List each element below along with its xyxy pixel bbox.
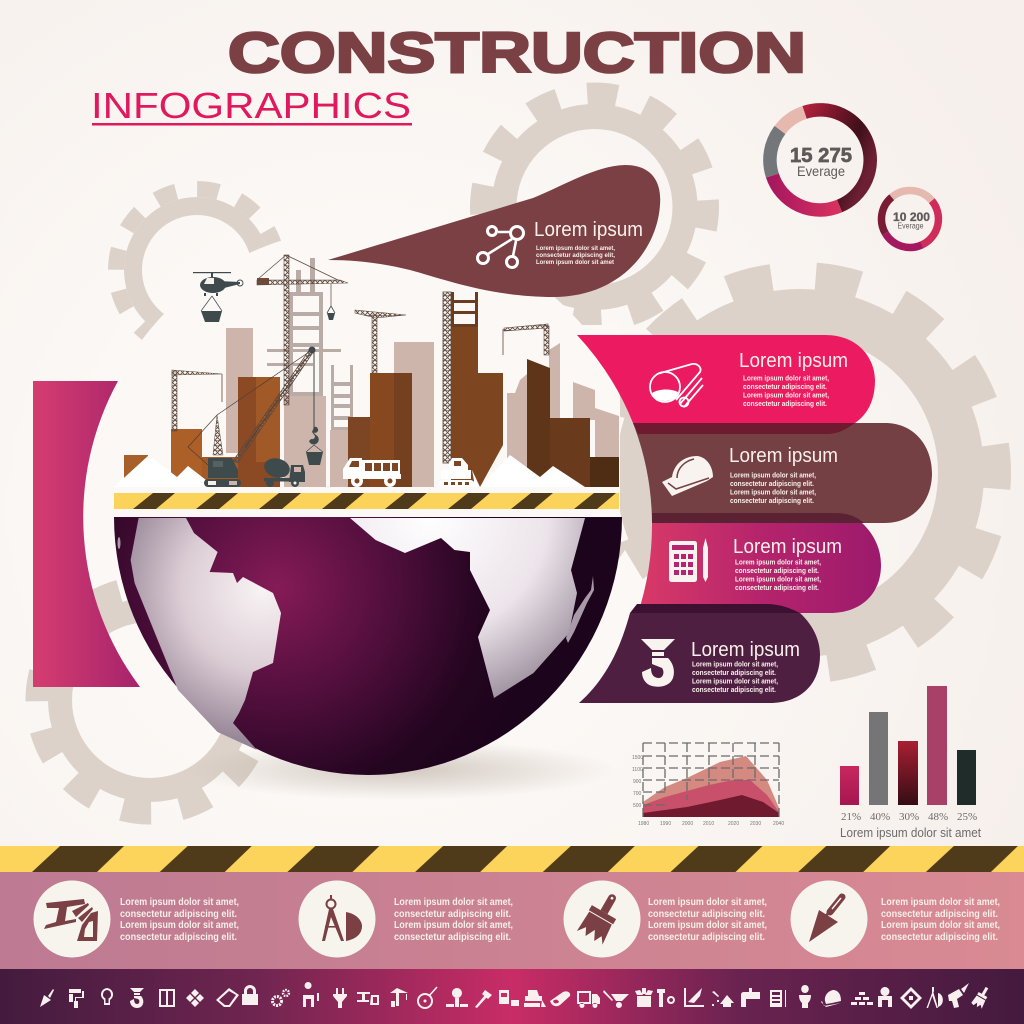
mixer truck (262, 455, 305, 487)
dump truck (343, 458, 401, 487)
icon: crane hook (641, 639, 675, 687)
body text: consectetur adipiscing elit. (743, 401, 827, 408)
white circle behind globe (85, 227, 651, 793)
bar values: 21% (841, 811, 861, 823)
icon: four diamonds (186, 989, 204, 1007)
subtitle: INFOGRAPHICS (91, 85, 411, 126)
bulldozer (439, 458, 480, 487)
body text: Lorem ipsum dolor sit amet, (730, 472, 816, 480)
gear: upper left (106, 179, 288, 361)
donut: 10 200: 10 200 (893, 210, 930, 224)
heading: Lorem ipsum (729, 445, 838, 467)
icon: drafting (684, 988, 704, 1007)
panel: band 1 pink (577, 335, 875, 423)
axis labels: 1990 (660, 821, 671, 827)
icon: bolt and nut (657, 989, 675, 1007)
axis labels: 1500 (632, 755, 643, 761)
heading: Lorem ipsum (534, 219, 643, 241)
text: Lorem ipsum dolor sit amet, (881, 897, 1000, 908)
land: madagascar (566, 576, 594, 643)
icon: wheelbarrow (603, 990, 629, 1008)
land: south america (131, 518, 281, 750)
text (120, 897, 239, 943)
body text (743, 376, 829, 408)
text: consectetur adipiscing elit. (394, 909, 511, 920)
icon row band (0, 969, 1024, 1024)
icon: steel beams (44, 899, 98, 941)
text: Lorem ipsum dolor sit amet, (648, 897, 767, 908)
text: Lorem ipsum dolor sit amet, (394, 920, 513, 931)
donut: 10 200 (881, 191, 938, 247)
axis labels: 700 (633, 791, 642, 797)
body text: consectetur adipiscing elit. (692, 670, 776, 677)
bar values: 25% (957, 811, 977, 823)
icon: spatula tool (475, 990, 492, 1008)
text: consectetur adipiscing elit. (648, 909, 765, 920)
text (648, 897, 767, 943)
body text: Lorem ipsum dolor sit amet, (692, 662, 778, 668)
icon: compass mini (926, 987, 943, 1008)
hazard strip: bottom (0, 846, 1024, 872)
text: Lorem ipsum dolor sit amet, (120, 920, 239, 931)
brown buildings (124, 455, 148, 480)
bar chart (840, 686, 981, 840)
left pink bar (33, 381, 140, 687)
body text: consectetur adipiscing elit. (692, 687, 776, 694)
icon: light bulb (101, 988, 113, 1005)
body text: consectetur adipiscing elit. (735, 568, 819, 575)
body text (735, 560, 821, 592)
icon: machine (499, 990, 519, 1006)
tower crane: large (257, 255, 348, 405)
icons (40, 982, 992, 1010)
text: Lorem ipsum dolor sit amet, (394, 897, 513, 908)
info item 3 (564, 880, 767, 958)
body text: Lorem ipsum dolor sit amet, (743, 376, 829, 382)
text: consectetur adipiscing elit. (394, 932, 511, 943)
text: consectetur adipiscing elit. (120, 932, 237, 943)
body text: Lorem ipsum dolor sit amet, (692, 678, 778, 686)
crawler crane (188, 346, 323, 487)
icon: gears (272, 990, 289, 1006)
city skyline (114, 258, 619, 487)
heading: Lorem ipsum (733, 536, 842, 558)
icon: hard hat (821, 990, 841, 1007)
icon: paint roller (69, 989, 84, 1008)
icon: bricks (851, 992, 873, 1005)
axis labels: 1980 (638, 821, 649, 827)
icon: hook (130, 988, 144, 1008)
panel: band 2 brown (633, 423, 932, 523)
area chart (632, 743, 784, 827)
body text: consectetur adipiscing elit. (743, 384, 827, 391)
areas (643, 756, 779, 817)
body text (730, 472, 816, 505)
grid (643, 743, 779, 817)
icon: pipes (550, 991, 570, 1006)
speech bubble panel (328, 165, 660, 297)
body text: Lorem ipsum dolor sit amet (536, 259, 615, 266)
icon: worker (303, 982, 319, 1007)
white wedge beside globe (500, 550, 645, 712)
gear: lower left (24, 574, 276, 826)
icon: pipes (650, 364, 703, 407)
icon: calculator and pencil (669, 538, 708, 582)
axis labels (632, 755, 784, 827)
body text: Lorem ipsum dolor sit amet, (735, 560, 821, 566)
lattice tower (443, 292, 451, 463)
heading: Lorem ipsum (739, 350, 848, 372)
text: consectetur adipiscing elit. (881, 932, 998, 943)
donut: 15 275 (770, 110, 870, 210)
axis labels: 2010 (703, 821, 714, 827)
icon: network nodes (478, 226, 524, 268)
icon: padlock (242, 985, 258, 1005)
bar values: 48% (928, 811, 948, 823)
icon: faucet (741, 988, 760, 1007)
heading: Lorem ipsum (691, 639, 800, 661)
icon: trowel (809, 897, 842, 942)
text: Lorem ipsum dolor sit amet, (881, 920, 1000, 931)
text: consectetur adipiscing elit. (648, 932, 765, 943)
donut: 10 200: Everage (898, 222, 924, 230)
icon: window (159, 989, 175, 1007)
donut: 15 275: 15 275 (790, 145, 852, 167)
light buildings (226, 328, 619, 487)
body text: Lorem ipsum dolor sit amet, (536, 245, 615, 252)
axis labels: 500 (633, 803, 642, 809)
icon: hard hat (662, 456, 713, 496)
body text: Lorem ipsum dolor sit amet, (735, 576, 821, 584)
bar values (841, 811, 977, 823)
white hills (114, 455, 585, 487)
info item 1 (34, 880, 239, 958)
text: consectetur adipiscing elit. (881, 909, 998, 920)
tower crane: middle (355, 310, 406, 373)
body text: consectetur adipiscing elit. (730, 498, 814, 505)
land: africa (350, 518, 585, 698)
body text: Lorem ipsum dolor sit amet, (730, 490, 816, 496)
icon: paint brush (577, 888, 627, 946)
text: consectetur adipiscing elit. (120, 909, 237, 920)
brown ladder (451, 292, 478, 327)
panel: band 4 dark plum (579, 613, 820, 703)
white backing behind skyline (530, 325, 620, 520)
body text (692, 662, 778, 694)
body text: consectetur adipiscing elit. (730, 481, 814, 488)
icon: builder (878, 987, 892, 1007)
gear: top centre (474, 86, 715, 328)
icon: sparks and roof (712, 991, 734, 1007)
icon: toilet (799, 985, 811, 1008)
hazard strip: globe (114, 493, 619, 509)
icon: crane (390, 988, 408, 1007)
icon: small brush (971, 985, 992, 1010)
icon: tiled diamond (900, 987, 922, 1009)
info item 4 (790, 880, 1000, 958)
text (394, 897, 513, 943)
axis labels: 1100 (632, 767, 643, 773)
axis labels: 2000 (682, 821, 693, 827)
axis labels: 2020 (728, 821, 739, 827)
text: Lorem ipsum dolor sit amet, (648, 920, 767, 931)
icon: trowel (40, 989, 54, 1007)
text: Lorem ipsum dolor sit amet, (120, 897, 239, 908)
panel: band 3 magenta (630, 523, 881, 613)
body text: consectetur adipiscing elit. (735, 585, 819, 592)
grey tower skeleton (289, 258, 323, 396)
icon: calculator (770, 990, 786, 1007)
title: CONSTRUCTION (228, 21, 806, 85)
globe (114, 517, 622, 775)
donut: 15 275: Everage (797, 163, 845, 179)
icon: map pin (446, 988, 468, 1007)
icon: tape measure (418, 987, 437, 1008)
body text: consectetur adipiscing elit, (536, 252, 615, 259)
helicopter (193, 272, 243, 322)
body text (536, 245, 615, 266)
gear: large right (569, 242, 1024, 704)
globe shadow (185, 740, 615, 800)
icon: delivery truck (577, 991, 600, 1008)
bar values: 40% (870, 811, 890, 823)
axis labels: 2030 (750, 821, 761, 827)
axis labels: 900 (633, 779, 642, 785)
tower crane: left (172, 370, 222, 431)
icon: plug (333, 988, 347, 1008)
tower crane: right (503, 324, 549, 355)
icon: folder (216, 988, 239, 1007)
bar caption: Lorem ipsum dolor sit amet (840, 825, 981, 840)
icon: beams (357, 992, 379, 1005)
text (881, 897, 1000, 943)
icon: bulldozer (524, 990, 546, 1007)
icon: boxes (635, 988, 653, 1007)
panel: bottom pink info (0, 872, 1024, 969)
axis labels: 2040 (773, 821, 784, 827)
bar values: 30% (899, 811, 919, 823)
icon: power drill (948, 983, 969, 1008)
icon: compass and protractor (322, 895, 362, 941)
info item 2 (298, 880, 513, 958)
grey ladder (331, 365, 353, 430)
body text: Lorem ipsum dolor sit amet, (743, 392, 829, 400)
